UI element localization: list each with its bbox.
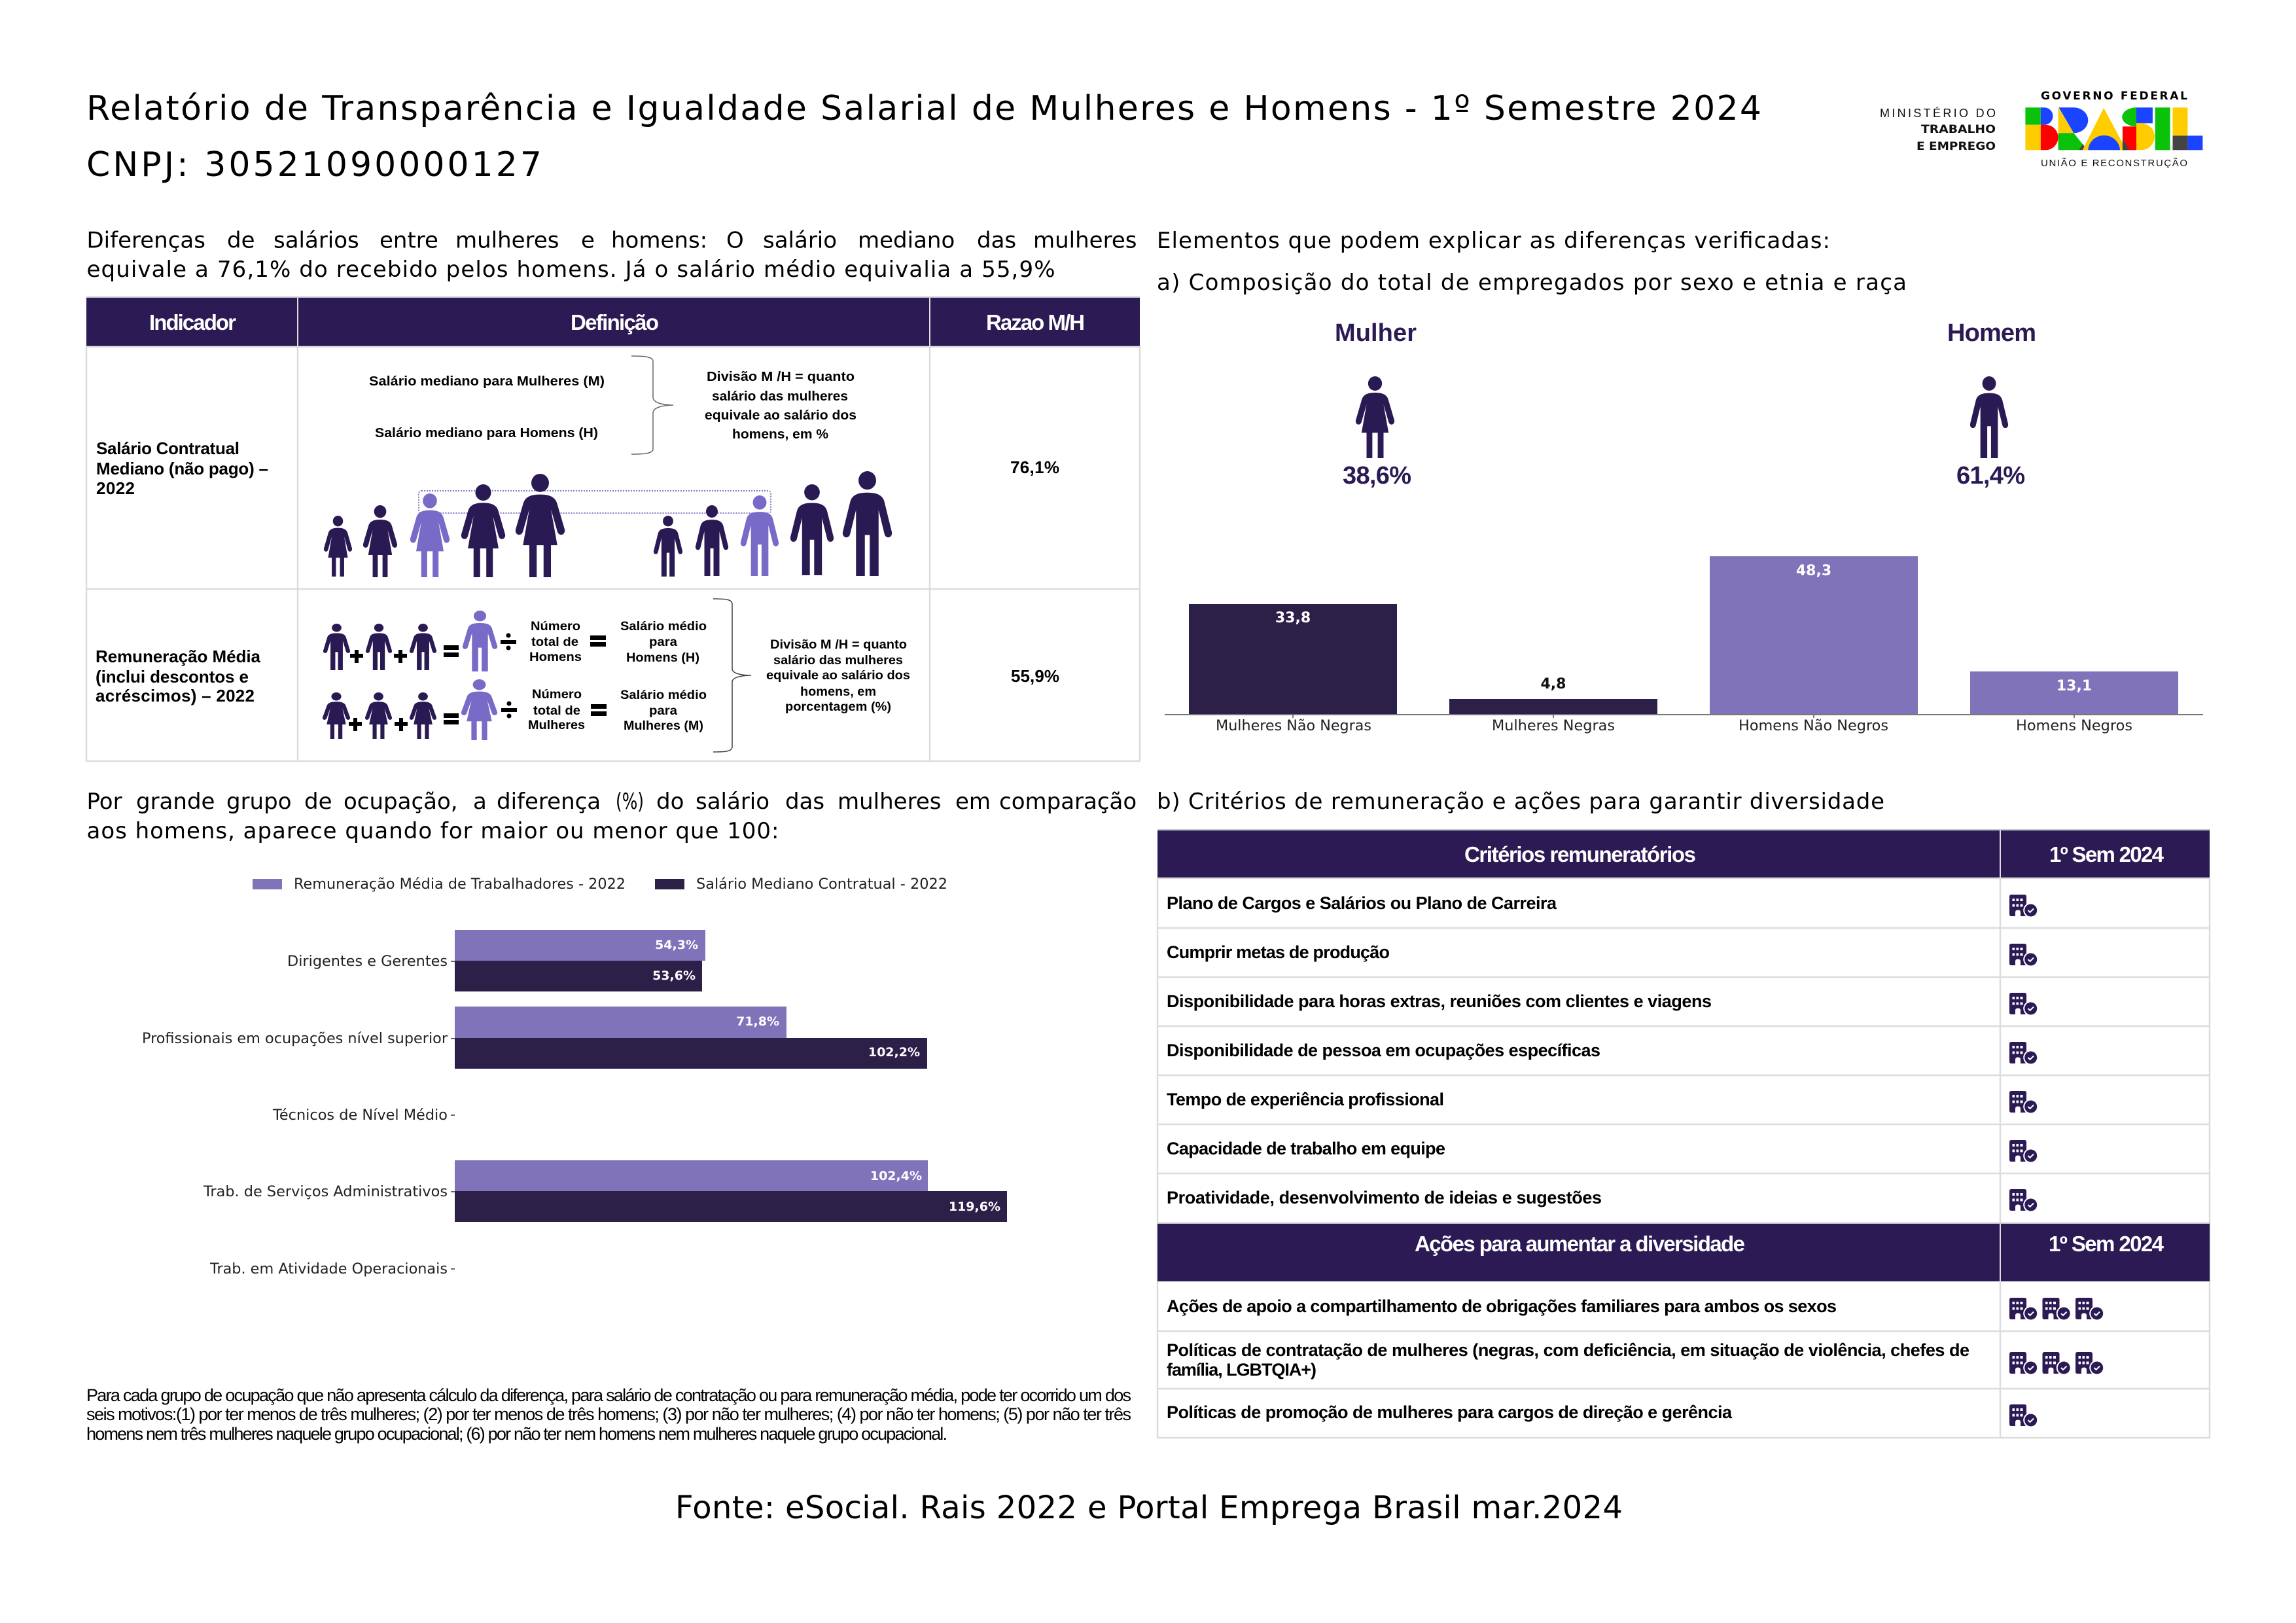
text block: diferenças de salários: Diferenças [86,228,205,254]
text block: por grande grupo: a [473,789,487,815]
header: critérios remuneratórios: Critérios remuneratórios [1464,842,1696,866]
text block: por grande grupo: salário [696,789,769,815]
action rows: família, LGBTQIA+) [1167,1360,1316,1380]
source note: Fonte: eSocial. Rais 2022 e Portal Emprega Brasil mar.2024 [675,1489,1623,1526]
text block: diferenças de salários: das [977,228,1016,254]
logo: ministério do trabalho e emprego: MINISTÉRIO DO [1880,107,1996,120]
text block: diferenças de salários: equivale a 76,1% do recebido pelos homens. Já o salário médio equivalia a 55,9% [86,257,1055,283]
logo: ministério do trabalho e emprego: TRABALHO [1921,123,1996,136]
definition explanation: divisão: Divisão M /H = quanto [707,370,855,384]
criteria rows: Plano de Cargos e Salários ou Plano de Carreira [1167,893,1557,913]
criteria rows: Tempo de experiência profissional [1167,1090,1444,1109]
formula: women: Número [532,688,582,702]
logo: governo federal brasil [2025,90,2202,169]
header: critérios remuneratórios [1157,829,2210,878]
text block: elementos: Elementos que podem explicar as diferenças verificadas: [1157,228,1830,254]
definition explanation: divisão média: porcentagem (%) [785,700,891,714]
table: indicadores [86,296,1140,761]
legend: Remuneração Média de Trabalhadores - 2022 [294,876,626,893]
text block: por grande grupo: grupo [226,789,292,815]
icons: women by height [324,474,565,577]
bar chart: composição: 13,1 [2057,678,2092,694]
text block: diferenças de salários: O [726,228,744,254]
panel: gender composition [1165,319,2203,734]
text block: por grande grupo: aos homens, aparece quando for maior ou menor que 100: [86,818,779,844]
logo: governo federal brasil: UNIÃO E RECONSTRUÇÃO [2041,158,2187,169]
bar chart: composição [1165,556,2203,734]
criteria rows: Disponibilidade de pessoa em ocupações específicas [1167,1041,1600,1060]
action rows: Políticas de contratação de mulheres (negras, com deficiência, em situação de violência, chefes de [1167,1340,1969,1360]
criteria icons [2009,895,2038,1212]
definition explanation: divisão: homens, em % [732,427,828,442]
criteria rows: Cumprir metas de produção [1167,942,1390,962]
header: ações para aumentar a diversidade [1157,1222,2210,1281]
definition explanation: divisão média: homens, em [800,685,876,699]
definition explanation: divisão média: Divisão M /H = quanto [770,638,907,652]
formula: men [323,611,707,671]
text block: por grande grupo: diferença [497,789,601,815]
header: ações para aumentar a diversidade: Ações para aumentar a diversidade [1415,1232,1745,1256]
title [86,89,1761,185]
formula: women: Mulheres [528,719,585,732]
title: Relatório de Transparência e Igualdade Salarial de Mulheres e Homens - 1º Semestre 2024 [86,89,1761,128]
text block: diferenças de salários: mulheres [1033,228,1137,254]
heading: composição: a) Composição do total de empregados por sexo e etnia e raça [1157,270,1907,296]
action rows [1167,1296,1969,1422]
formula: women: para [649,704,677,718]
category labels: Dirigentes e Gerentes [287,954,448,970]
table header: Razao M/H [986,310,1085,334]
criteria rows: Disponibilidade para horas extras, reuniões com clientes e viagens [1167,991,1712,1011]
value: 76,1%: 76,1% [1010,457,1059,477]
row label: remuneração média: Remuneração Média [96,647,261,666]
bar chart: composição: Mulheres Não Negras [1216,718,1371,734]
formula: men: Homens [529,651,582,664]
bar values: 119,6% [949,1200,1000,1214]
median highlight box [419,491,771,513]
table: critérios e ações [1157,829,2210,1438]
mulher summary: 38,6% [1343,462,1411,490]
footnote: seis motivos:(1) por ter menos de três mulheres; (2) por ter menos de três homens; (3) por não ter mulheres; (4) por não ter homens; (5) por não ter três [86,1404,1131,1424]
category labels: Profissionais em ocupações nível superior [142,1031,448,1047]
category labels: Trab. em Atividade Operacionais [209,1261,448,1277]
action rows: Políticas de promoção de mulheres para cargos de direção e gerência [1167,1402,1733,1422]
homem summary: Homem [1947,319,2036,347]
formula: men: Número [531,620,580,633]
text block: diferenças de salários: salário [763,228,837,254]
legend: Salário Mediano Contratual - 2022 [696,876,947,893]
icons: men by height [654,471,892,577]
text block: diferenças de salários: mediano [858,228,955,254]
definition labels: salário mediano: Salário mediano para Mulheres (M) [369,374,605,389]
bars [455,930,1007,1222]
definition explanation: divisão: salário das mulheres [712,389,848,404]
formula: men: para [649,635,677,649]
text block: por grande grupo [86,789,1137,844]
category labels: Trab. de Serviços Administrativos [203,1184,448,1200]
logo: ministério do trabalho e emprego [1880,107,1996,153]
table header [86,296,1140,347]
text block: por grande grupo: mulheres [838,789,941,815]
brace [713,599,751,752]
text block: por grande grupo: ocupação, [344,789,458,815]
formula: women: Mulheres (M) [624,719,703,733]
legend [253,876,947,893]
action icons [2009,1298,2104,1428]
formula: women [323,679,707,740]
homem summary: 61,4% [1956,462,2025,490]
header: critérios remuneratórios: 1º Sem 2024 [2049,842,2164,866]
action rows: Ações de apoio a compartilhamento de obrigações familiares para ambos os sexos [1167,1296,1837,1316]
formula: men: Homens (H) [626,651,699,665]
category labels: Técnicos de Nível Médio [272,1107,448,1124]
row label: salário contratual: 2022 [96,478,135,498]
category labels [142,954,455,1277]
text block: por grande grupo: de [304,789,332,815]
row label: remuneração média: acréscimos) – 2022 [96,686,255,705]
mulher summary: Mulher [1335,319,1417,347]
definition explanation: divisão média: salário das mulheres [773,654,903,668]
homem summary [1947,319,2036,490]
definition explanation: divisão [705,370,857,442]
definition labels: salário mediano [369,374,605,440]
formula: men: total de [531,635,578,649]
definition explanation: divisão média [766,638,910,714]
table header: Indicador [149,310,236,334]
bar chart: composição: 48,3 [1796,563,1831,579]
text block: por grande grupo: do [656,789,684,815]
text block: por grande grupo: das [785,789,824,815]
bar chart: composição: Mulheres Negras [1492,718,1615,734]
bar chart: ocupação [142,876,1007,1277]
bar chart: composição: Homens Negros [2016,718,2132,734]
definition explanation: divisão: equivale ao salário dos [705,408,857,423]
row label: remuneração média: (inclui descontos e [96,667,249,687]
title: CNPJ: 30521090000127 [86,145,542,185]
row label: salário contratual: Mediano (não pago) – [96,459,268,478]
text block: por grande grupo: em [955,789,991,815]
text block: diferenças de salários: de [227,228,255,254]
table header: Definição [571,310,659,334]
logo: governo federal brasil: GOVERNO FEDERAL [2041,90,2187,103]
bar values: 71,8% [736,1014,779,1029]
bar values: 102,2% [868,1045,920,1060]
definition labels: salário mediano: Salário mediano para Homens (H) [375,426,598,440]
text block: por grande grupo: (%) [616,789,644,815]
text block: por grande grupo: comparação [999,789,1137,815]
formula: women: total de [533,704,580,718]
value: 55,9%: 55,9% [1011,666,1059,686]
definition explanation: divisão média: equivale ao salário dos [766,669,910,683]
formula: men: Salário médio [620,620,707,633]
row label: salário contratual [96,438,268,498]
formula: women: Salário médio [620,688,707,702]
brace [631,356,673,454]
row label: salário contratual: Salário Contratual [96,438,239,458]
criteria rows: Proatividade, desenvolvimento de ideias e sugestões [1167,1188,1602,1207]
text block: por grande grupo: grande [136,789,215,815]
header: ações para aumentar a diversidade: 1º Sem 2024 [2049,1232,2164,1256]
bar chart: composição: Homens Não Negros [1739,718,1888,734]
bar chart: composição: 4,8 [1541,676,1566,692]
text block: diferenças de salários: mulheres [455,228,559,254]
text block: diferenças de salários [86,228,1137,283]
criteria rows: Capacidade de trabalho em equipe [1167,1139,1445,1158]
bar chart: composição: 33,8 [1275,610,1311,626]
text block: diferenças de salários: homens: [611,228,707,254]
bar values [652,938,1000,1214]
row label: remuneração média [96,647,261,705]
footnote [86,1385,1131,1444]
bar values: 53,6% [652,969,696,983]
text block: por grande grupo: Por [86,789,122,815]
text block: diferenças de salários: entre [380,228,438,254]
mulher summary [1335,319,1417,490]
bar values: 54,3% [655,938,698,952]
logo: ministério do trabalho e emprego: E EMPREGO [1916,140,1996,153]
heading: critérios: b) Critérios de remuneração e ações para garantir diversidade [1157,789,1884,815]
bar values: 102,4% [870,1169,922,1183]
footnote: Para cada grupo de ocupação que não apresenta cálculo da diferença, para salário de contratação ou para remuneração média, pode ter ocorrido um dos [86,1385,1131,1405]
footnote: homens nem três mulheres naquele grupo ocupacional; (6) por não ter nem homens nem mulheres naquele grupo ocupacional. [86,1424,947,1444]
text block: diferenças de salários: salários [274,228,359,254]
text block: diferenças de salários: e [581,228,595,254]
criteria rows [1167,893,1712,1207]
